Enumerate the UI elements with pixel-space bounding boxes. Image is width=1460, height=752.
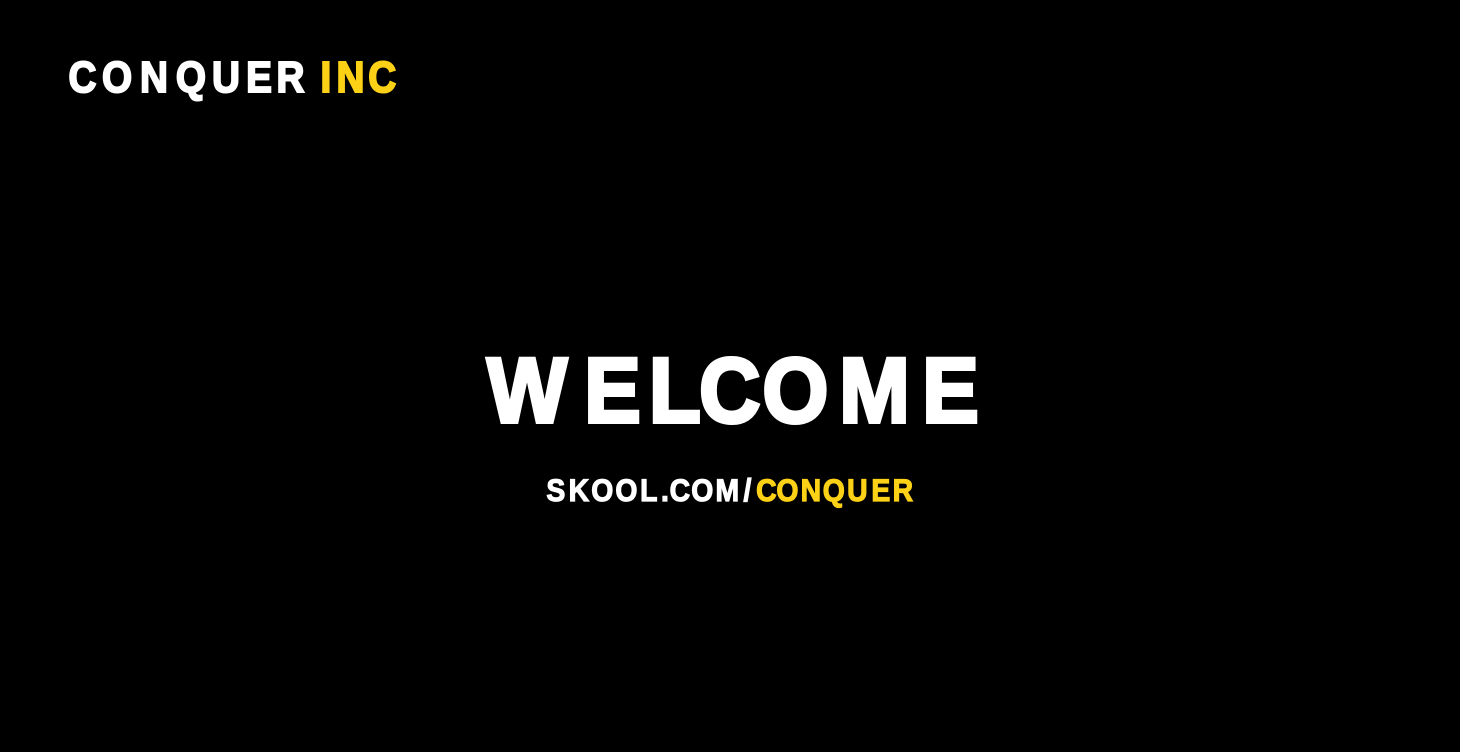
link: skool.com/conquer: CONQUER xyxy=(756,474,913,508)
logo: Conquer Inc: CONQUER xyxy=(69,52,305,102)
link: skool.com/conquer: SKOOL.COM/ xyxy=(546,474,752,508)
heading: Welcome: WELCOME xyxy=(487,339,979,442)
logo: Conquer Inc: INC xyxy=(320,52,396,102)
